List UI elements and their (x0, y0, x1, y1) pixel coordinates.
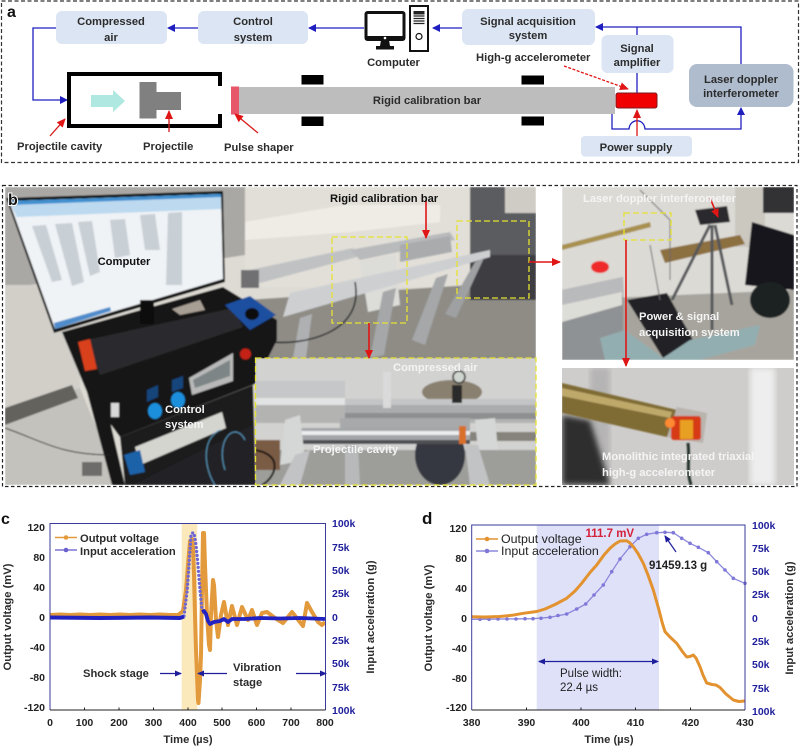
x axis ticks: 0 (47, 717, 53, 729)
left axis ticks: 120 (449, 523, 467, 535)
photo: main setup (5, 187, 536, 485)
right axis ticks: 25k (752, 636, 770, 648)
box: power supply (581, 136, 692, 156)
mouse pad (225, 296, 276, 330)
right axis ticks: 50k (332, 658, 350, 670)
annotation: shock stage: Shock stage (83, 668, 149, 680)
photo: laser doppler setup (562, 187, 794, 360)
x axis (50, 708, 326, 710)
peak annotation: 91459.13 g: 91459.13 g (649, 560, 707, 572)
box: compressed air (56, 11, 167, 44)
box: compressed air: Compressed (77, 16, 145, 28)
stand (140, 300, 154, 324)
left axis ticks: 0 (461, 613, 467, 625)
left axis ticks: 40 (455, 583, 467, 595)
panel a: system schematic (2, 1, 798, 162)
series: input acceleration rising and falling (184, 533, 202, 616)
right axis ticks: 50k (332, 565, 350, 577)
label: power and signal acquisition system (639, 311, 740, 339)
x axis ticks: 100 (76, 717, 93, 729)
series: input acceleration baseline (50, 616, 184, 618)
left axis ticks: -80 (452, 673, 467, 685)
legend: chart c: Input acceleration (80, 546, 176, 558)
peak annotation: 91459.13 g (649, 536, 707, 572)
keyboard (87, 308, 243, 375)
x axis ticks: 500 (213, 717, 231, 729)
left axis ticks: 80 (33, 552, 45, 564)
box: control system (198, 11, 308, 44)
axis titles (2, 560, 377, 746)
label: computer: Computer (367, 57, 421, 69)
arrows: blue signal connections (33, 27, 741, 129)
label: rigid calibration bar photo: Rigid calibration bar (330, 193, 439, 205)
x axis ticks: 420 (682, 717, 699, 729)
rigid calibration bar (239, 87, 615, 114)
box: power supply: Power supply (600, 142, 673, 154)
axis titles: Input acceleration (g) (784, 561, 796, 675)
axis titles: Time (µs) (163, 734, 213, 746)
x axis ticks: 300 (145, 717, 162, 729)
left axis ticks: -80 (30, 672, 45, 684)
label: projectile cavity photo: Projectile cavity (313, 444, 399, 456)
axis titles: Output voltage (mV) (2, 563, 14, 670)
x axis ticks: 600 (248, 717, 265, 729)
labels and arrow: pulse shaper (224, 114, 294, 154)
bar supports (302, 75, 544, 126)
shaded shock stage band (182, 524, 197, 710)
yellow dashed highlight boxes (256, 213, 671, 485)
label: high-g accelerometer: High-g accelerometer (476, 52, 591, 64)
box: compressed air: air (104, 32, 118, 44)
label: computer photo: Computer (98, 256, 151, 268)
axis titles: Output voltage (mV) (423, 564, 435, 671)
labels and arrow: projectile: Projectile (143, 141, 193, 153)
left axis ticks: -40 (452, 643, 467, 655)
legend: chart d: Output voltage (501, 532, 582, 546)
rails (250, 248, 357, 283)
label: power and signal acquisition system: acquisition system (639, 327, 740, 339)
right axis ticks: 100k (752, 520, 776, 532)
monitor (6, 191, 225, 333)
right axis ticks: 75k (752, 543, 770, 555)
box: laser doppler interferometer (689, 64, 794, 107)
shaded pulse width band (537, 525, 659, 710)
label: compressed air photo: Compressed air (393, 362, 478, 374)
label: control system photo: system (165, 419, 204, 431)
label: monolithic integrated triaxial accelerometer: Monolithic integrated triaxial (602, 451, 754, 463)
annotation: vibration stage: Vibration (233, 662, 281, 674)
x axis ticks: 700 (282, 717, 300, 729)
left axis ticks: -120 (24, 702, 45, 714)
labels and arrow: pulse shaper: Pulse shaper (224, 142, 294, 154)
box: signal amplifier: Signal (620, 43, 654, 55)
panel d: chart, 380 to 430 microseconds (422, 509, 796, 746)
x axis ticks: 200 (110, 717, 128, 729)
pulse width annotation (539, 662, 658, 694)
projectile cavity (69, 74, 220, 126)
panel letter c: c (1, 511, 10, 528)
x axis ticks (47, 717, 334, 729)
right axis ticks: 100k (752, 706, 776, 718)
left axis ticks: 40 (33, 582, 45, 594)
icon: computer (365, 6, 428, 51)
legend: chart d: Input acceleration (501, 544, 599, 558)
right axis ticks: 75k (332, 682, 350, 694)
box: laser doppler interferometer: interferometer (703, 88, 780, 100)
photo: triaxial accelerometer close-up (562, 368, 794, 485)
label: monolithic integrated triaxial accelerometer (602, 451, 754, 479)
pulse width annotation: Pulse width: (560, 668, 622, 680)
x axis (472, 708, 745, 710)
right axis ticks: 100k (332, 705, 356, 717)
label: laser doppler interferometer photo: Laser doppler interferometer (583, 193, 737, 205)
box: laser doppler interferometer: Laser doppler (704, 74, 779, 86)
left axis ticks: 0 (39, 612, 45, 624)
axis titles: Input acceleration (g) (365, 560, 377, 674)
photo inset: projectile cavity close-up (255, 358, 536, 485)
axes frame (50, 524, 326, 710)
right axis ticks: 75k (332, 542, 350, 554)
red callout arrows (369, 198, 718, 366)
left axis ticks: -120 (446, 702, 467, 714)
axes frame (472, 525, 745, 710)
axis titles (423, 561, 796, 746)
axis titles: Time (µs) (584, 734, 634, 746)
box: signal acquisition system (462, 9, 595, 45)
right axis ticks: 25k (752, 589, 770, 601)
pulse shaper (231, 86, 239, 114)
panel c: chart, 0 to 800 microseconds (1, 511, 377, 746)
panel letter b: b (8, 192, 18, 209)
right axis ticks: 0 (752, 613, 758, 625)
x axis ticks: 410 (627, 717, 644, 729)
series: output voltage (472, 541, 745, 702)
series: chart c curves (50, 533, 325, 703)
series: output voltage (50, 533, 325, 703)
panel letter a: a (7, 4, 16, 21)
box: signal acquisition system: Signal acquisition (480, 16, 576, 28)
dashed frame: panel b (2, 186, 797, 486)
right axis ticks: 50k (752, 566, 770, 578)
high-g accelerometer sensor (616, 93, 657, 108)
box: control system: Control (233, 16, 273, 28)
annotation: vibration stage: stage (233, 677, 262, 689)
label: control system photo (165, 404, 205, 431)
arrow: red dashed to sensor (564, 66, 628, 89)
x axis ticks: 430 (736, 717, 754, 729)
projectile (140, 82, 181, 118)
right axis ticks: 75k (752, 683, 770, 695)
annotation: vibration stage (198, 662, 326, 689)
legend: chart d (476, 532, 599, 558)
legend: chart c: Output voltage (80, 533, 159, 545)
cabinet (62, 287, 277, 437)
right axis ticks: 100k (332, 518, 356, 530)
x axis ticks: 400 (179, 717, 197, 729)
left axis ticks: -40 (30, 642, 45, 654)
left axis ticks: 120 (27, 522, 45, 534)
box: control system: system (234, 32, 272, 44)
panel letter d: d (422, 509, 432, 528)
labels and arrow: projectile cavity (17, 119, 103, 153)
box: signal amplifier (602, 35, 674, 73)
box: signal acquisition system: system (509, 30, 547, 42)
left axis ticks (24, 522, 45, 714)
pulse width annotation: 22.4 µs (560, 682, 598, 694)
box: signal amplifier: amplifier (614, 57, 661, 69)
rigid calibration bar: Rigid calibration bar (373, 95, 482, 107)
x axis ticks (463, 717, 754, 729)
front panel (189, 353, 233, 395)
arrow: power supply to sensor (636, 110, 638, 136)
x axis ticks: 380 (463, 717, 481, 729)
left axis ticks: 80 (455, 553, 467, 565)
legend: chart c (55, 533, 176, 558)
right axis ticks: 25k (332, 588, 350, 600)
labels and arrow: projectile cavity: Projectile cavity (17, 141, 103, 153)
right axis ticks (752, 520, 776, 718)
panel b: experimental setup photos (2, 186, 797, 486)
label: control system photo: Control (165, 404, 205, 416)
annotation: shock stage (83, 668, 181, 680)
label: monolithic integrated triaxial accelerometer: high-g accelerometer (602, 467, 716, 479)
labels and arrow: projectile (143, 111, 193, 153)
arrow: cyan motion direction (91, 90, 125, 112)
right axis ticks: 25k (332, 635, 350, 647)
label: power and signal acquisition system: Power & signal (639, 311, 719, 323)
x axis ticks: 400 (572, 717, 590, 729)
series: input acceleration tail (202, 611, 325, 624)
peak label: 111.7 mV: 111.7 mV (586, 528, 634, 540)
right axis ticks (332, 518, 356, 717)
right axis ticks: 50k (752, 659, 770, 671)
right axis ticks: 0 (332, 612, 338, 624)
left axis ticks (446, 523, 467, 714)
x axis ticks: 800 (316, 717, 334, 729)
series: input acceleration (472, 530, 747, 621)
x axis ticks: 390 (518, 717, 535, 729)
